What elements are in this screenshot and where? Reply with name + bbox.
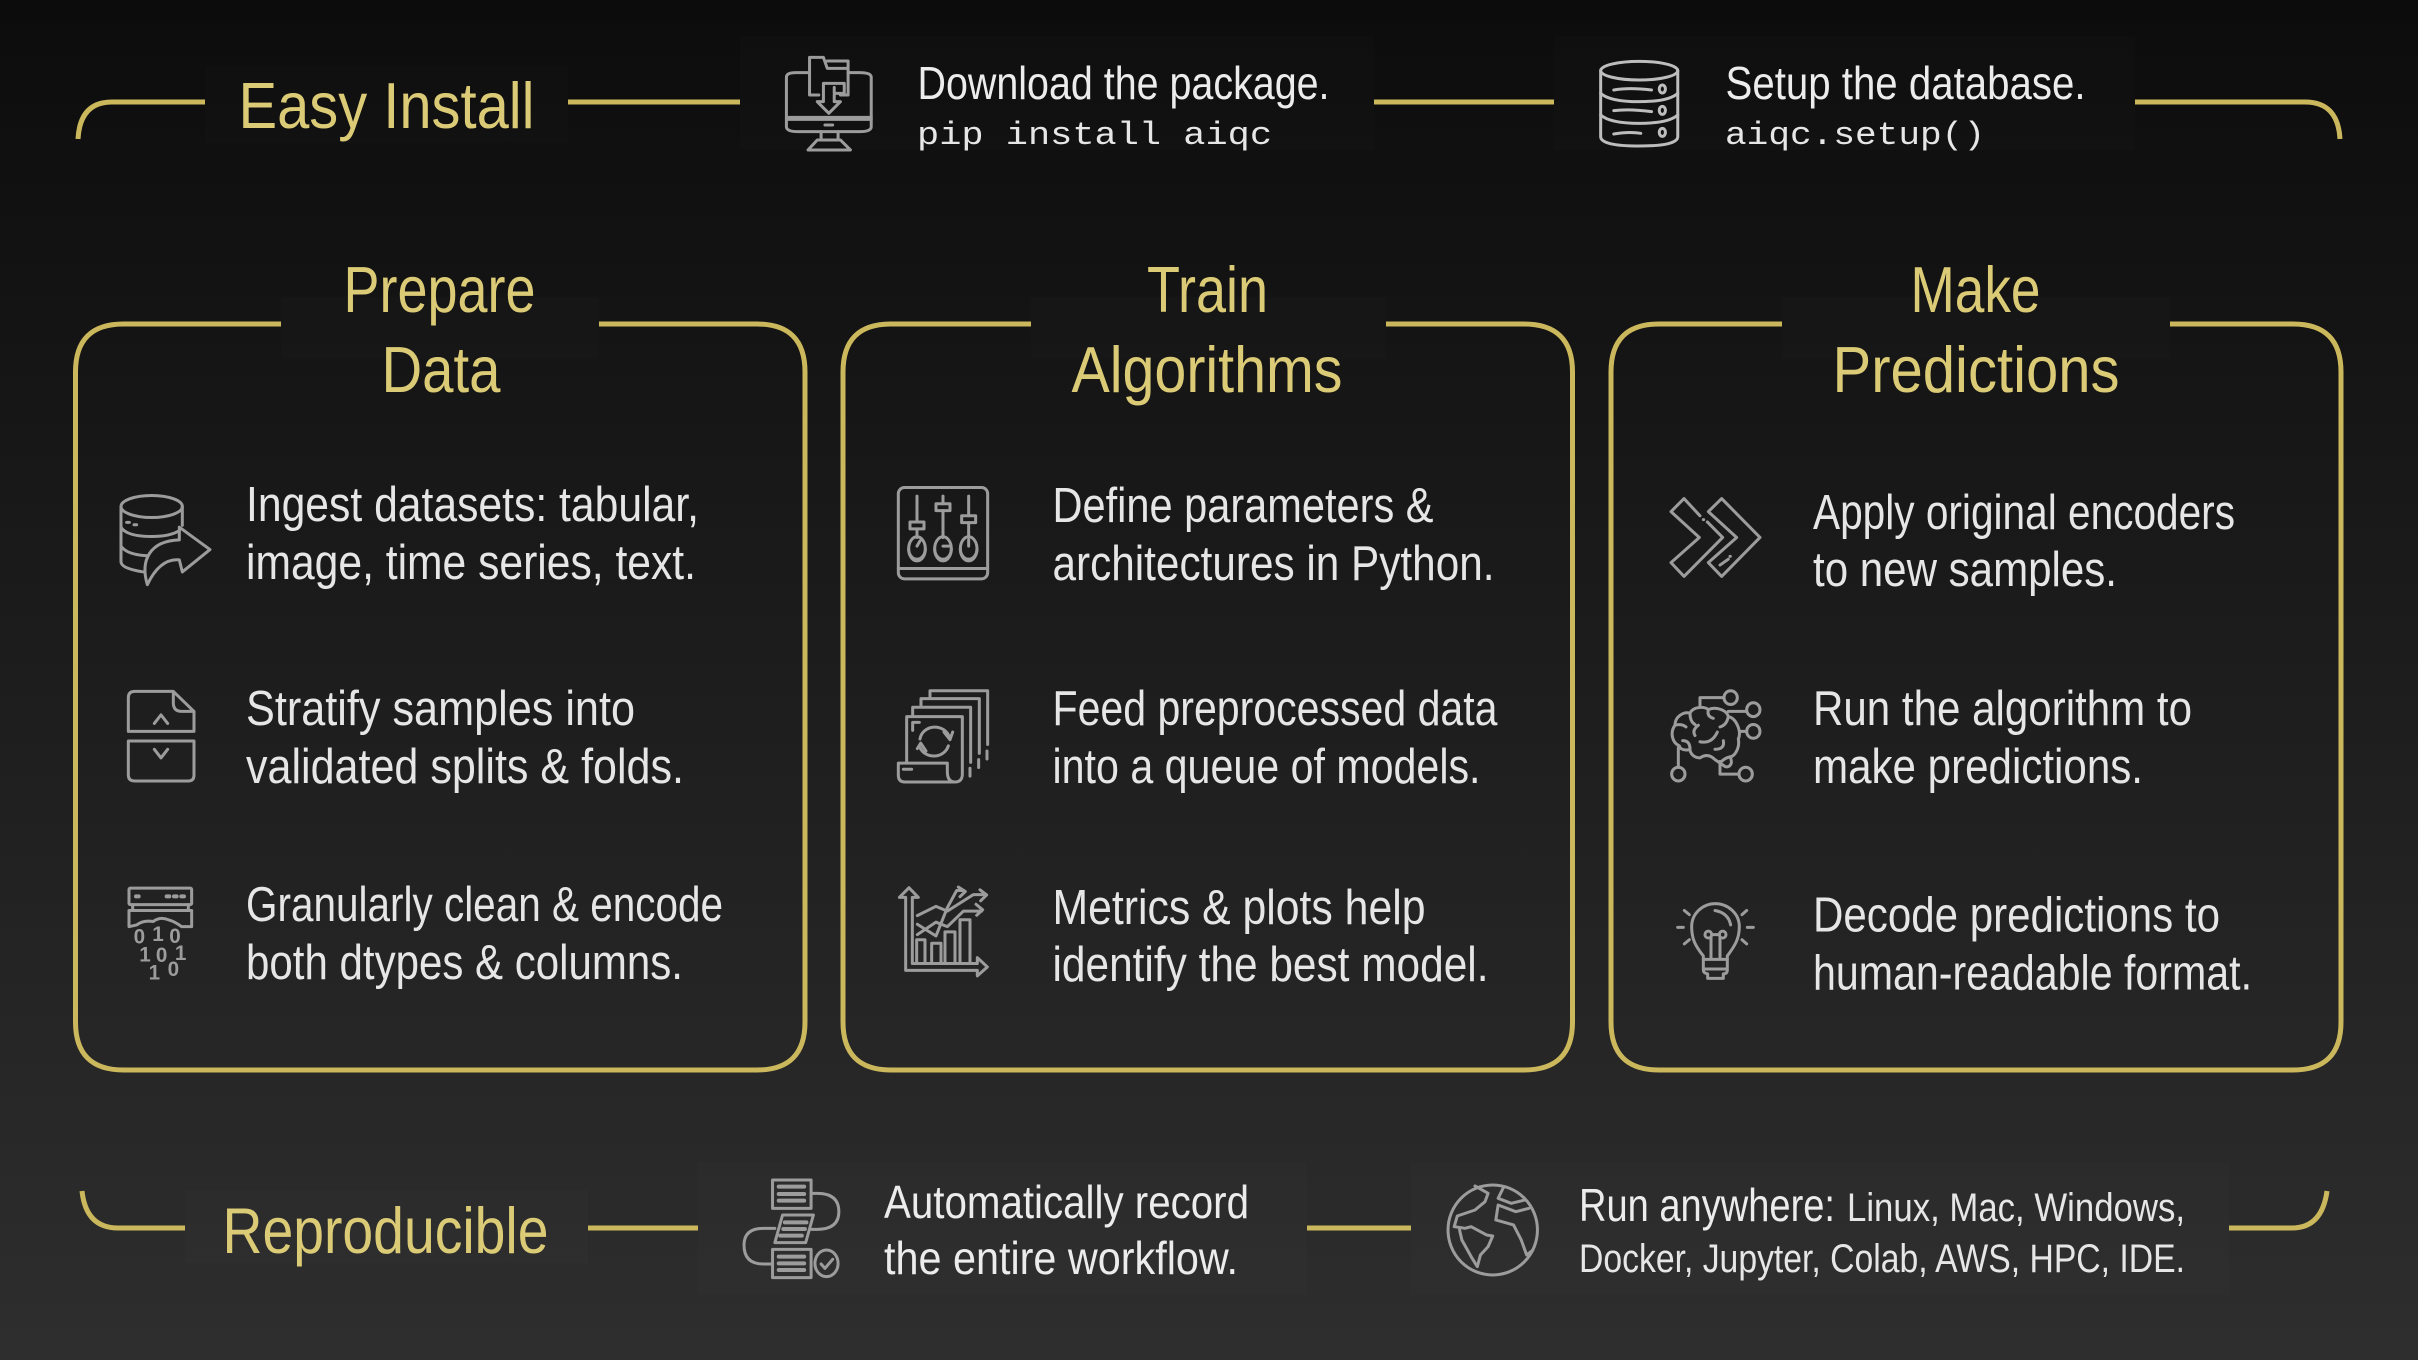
heading: easy install: Easy Install <box>238 69 534 142</box>
icon: globe <box>1448 1185 1537 1275</box>
item: feed preprocessed data: Feed preprocessed data <box>1052 682 1498 736</box>
item: clean and encode: both dtypes & columns. <box>246 936 683 990</box>
item: run the algorithm: make predictions. <box>1813 740 2143 794</box>
icon: document stack <box>898 691 988 782</box>
icon: workflow documents <box>744 1180 839 1278</box>
icon: sliders <box>898 488 988 579</box>
item: define parameters: Define parameters & <box>1052 479 1434 533</box>
icon: download to computer <box>786 57 871 150</box>
item: feed preprocessed data <box>1052 682 1498 794</box>
item: stratify samples: Stratify samples into <box>246 682 635 736</box>
item: apply encoders <box>1813 486 2235 597</box>
item: define parameters <box>1052 479 1494 591</box>
item: clean and encode <box>246 878 723 990</box>
text: automatically record: the entire workflow. <box>884 1232 1238 1284</box>
item: ingest datasets: image, time series, text. <box>246 536 696 590</box>
icon: shredder binary: 0 <box>156 944 167 967</box>
icon: double chevron <box>1671 499 1760 576</box>
icon: brain network <box>1672 691 1760 781</box>
item: metrics and plots: Metrics & plots help <box>1052 881 1426 935</box>
item: ingest datasets <box>246 478 699 590</box>
heading: make predictions: Make <box>1910 253 2040 326</box>
heading: train algorithms <box>1072 253 1342 406</box>
item: decode predictions: Decode predictions to <box>1813 888 2220 942</box>
text: setup the database: aiqc.setup() <box>1725 117 1985 154</box>
section: easy install <box>78 36 2340 154</box>
item: ingest datasets: Ingest datasets: tabular, <box>246 478 699 532</box>
icon: shredder binary: 1 <box>175 942 187 965</box>
text: setup the database: Setup the database. <box>1726 57 2086 109</box>
text: automatically record: Automatically record <box>884 1176 1249 1228</box>
item: clean and encode: Granularly clean & encode <box>246 878 723 932</box>
text: run anywhere: Docker, Jupyter, Colab, AWS, HPC, IDE. <box>1579 1237 2185 1281</box>
text: automatically record <box>884 1176 1249 1284</box>
item: stratify samples <box>246 682 684 794</box>
item: stratify samples: validated splits & folds. <box>246 740 684 794</box>
icon: shredder binary: 1 <box>139 943 151 967</box>
heading: train algorithms: Algorithms <box>1072 333 1342 406</box>
icon: shredder binary: 0 <box>169 925 181 948</box>
icon: light bulb <box>1678 904 1753 978</box>
item: apply encoders: Apply original encoders <box>1813 486 2235 540</box>
item: decode predictions: human-readable format. <box>1813 946 2252 1000</box>
heading: make predictions: Predictions <box>1832 333 2120 406</box>
panel: train algorithms <box>843 253 1572 1070</box>
item: decode predictions <box>1813 888 2252 1000</box>
icon: shredder binary: 0 <box>168 958 179 981</box>
item: feed preprocessed data: into a queue of models. <box>1052 740 1480 794</box>
section: reproducible <box>82 1162 2327 1295</box>
text: download the package <box>917 57 1330 154</box>
item: metrics and plots <box>1052 881 1488 992</box>
item: define parameters: architectures in Python. <box>1052 537 1494 591</box>
icon: database <box>1601 61 1678 146</box>
item: metrics and plots: identify the best model. <box>1052 938 1488 992</box>
text: run anywhere <box>1579 1179 2185 1281</box>
icon: shredder binary: 0 <box>134 925 145 949</box>
icon: split file <box>128 691 194 781</box>
icon: shredder binary <box>129 888 192 984</box>
panel: prepare data <box>76 253 805 1070</box>
heading: make predictions <box>1832 253 2120 406</box>
icon: shredder binary: 1 <box>152 922 164 946</box>
icon: shredder binary: 1 <box>149 961 160 984</box>
heading: prepare data: Data <box>382 333 501 406</box>
panel: make predictions <box>1611 253 2341 1070</box>
text: run anywhere: Run anywhere: <box>1579 1179 1835 1231</box>
text: setup the database <box>1725 57 2086 154</box>
item: apply encoders: to new samples. <box>1813 543 2117 597</box>
text: download the package: Download the package. <box>918 57 1330 109</box>
heading: prepare data <box>344 253 536 406</box>
heading: prepare data: Prepare <box>344 253 536 326</box>
heading: reproducible: Reproducible <box>222 1194 548 1267</box>
icon: chart with arrows <box>899 887 987 976</box>
heading: train algorithms: Train <box>1147 253 1268 326</box>
icon: database share <box>121 495 210 585</box>
item: run the algorithm: Run the algorithm to <box>1813 682 2192 736</box>
item: run the algorithm <box>1813 682 2192 794</box>
text: download the package: pip install aiqc <box>917 117 1272 154</box>
text: run anywhere: Linux, Mac, Windows, <box>1847 1186 2185 1230</box>
